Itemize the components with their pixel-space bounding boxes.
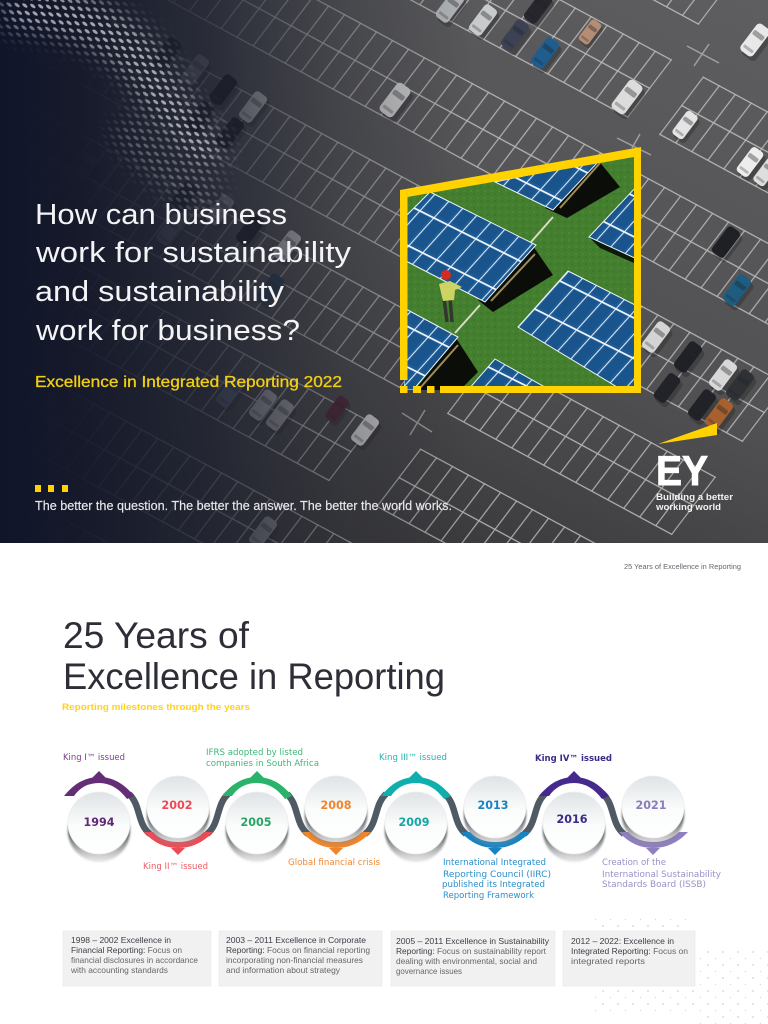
subheading: milestones: Reporting milestones through the years — [62, 702, 250, 713]
subtitle: report name: Excellence in Integrated Reporting 2022 — [35, 374, 342, 391]
milestone 2002 — [143, 776, 213, 872]
milestone 1994 — [63, 753, 134, 862]
panel: 2005-2011 Sustainability Reporting — [391, 931, 555, 986]
halftone dot swath — [0, 0, 240, 223]
milestone 2008 — [288, 776, 381, 868]
heading: cover question — [35, 199, 352, 347]
logo: EY: Building a better — [656, 492, 733, 503]
wave connector — [129, 794, 624, 834]
milestone 1994: King I™ issued — [63, 753, 125, 763]
panel: 2003-2011 Corporate Reporting: Reporting: Focus on financial reporting — [226, 945, 370, 955]
milestone 2013 — [442, 776, 551, 901]
logo: EY — [655, 423, 733, 513]
panel: 1998-2002 Financial Reporting: Financial Reporting: Focus on — [71, 945, 182, 955]
panel: 1998-2002 Financial Reporting: financial disclosures in accordance — [71, 955, 198, 965]
panel: 2005-2011 Sustainability Reporting: dealing with environmental, social and — [396, 956, 537, 966]
panel: 1998-2002 Financial Reporting: with accounting standards — [70, 965, 168, 975]
yellow frame — [400, 147, 641, 393]
road markings — [402, 44, 719, 435]
navy gradient overlay — [0, 0, 456, 543]
timeline: milestones 1994 to 2021 — [63, 748, 721, 901]
milestone 2009: 2009 — [398, 815, 430, 829]
panel: 1998-2002 Financial Reporting — [63, 931, 211, 986]
title: 25 Years of Excellence in Reporting: 25 Years of — [63, 615, 250, 656]
logo: EY: working world — [655, 502, 721, 513]
milestone 2013: International Integrated — [443, 858, 546, 868]
tagline: The better the question. The better the answer. The better the world works. — [35, 499, 452, 513]
panel: 2012-2022 Integrated Reporting: 2012 – 2022: Excellence in — [571, 936, 674, 946]
panel: 2012-2022 Integrated Reporting: integrated reports — [571, 956, 645, 966]
milestone 2013: Reporting Framework — [443, 891, 534, 901]
decorative dot arc — [590, 918, 768, 1024]
milestone 2016: 2016 — [556, 812, 588, 826]
milestone 2008: Global financial crisis — [288, 858, 381, 868]
milestone 2021: Creation of the — [602, 858, 666, 868]
worker in high-vis vest — [439, 270, 462, 322]
panel: 2005-2011 Sustainability Reporting: Reporting: Focus on sustainability report — [396, 946, 547, 956]
milestone 2009 — [379, 753, 451, 862]
panel: 2012-2022 Integrated Reporting — [563, 931, 695, 986]
milestone 2002: King II™ issued — [143, 862, 208, 872]
milestone 2021: 2021 — [636, 798, 666, 812]
milestone 2008: 2008 — [320, 798, 352, 812]
milestone 2005 — [206, 748, 319, 862]
panel: 1998-2002 Financial Reporting: 1998 – 2002 Excellence in — [71, 935, 171, 945]
panel: 2003-2011 Corporate Reporting — [219, 931, 382, 986]
title: 25 Years of Excellence in Reporting: Excellence in Reporting — [63, 656, 445, 697]
milestone 2002: 2002 — [162, 798, 192, 812]
parking bays — [104, 0, 768, 543]
milestone 2005: IFRS adopted by listed — [206, 748, 303, 758]
milestone 2021 — [602, 776, 721, 890]
milestone 2021: International Sustainability — [602, 870, 721, 880]
milestone 2021: Standards Board (ISSB) — [602, 880, 706, 890]
heading: cover question: How can business — [35, 199, 287, 231]
solar field — [400, 148, 640, 393]
panel: 2005-2011 Sustainability Reporting: 2005 – 2011 Excellence in Sustainability — [396, 936, 550, 946]
heading: cover question: work for sustainability — [35, 237, 352, 269]
icon: three yellow squares — [35, 485, 68, 492]
parked cars — [153, 0, 768, 543]
milestone 2013: Reporting Council (IIRC) — [443, 870, 551, 880]
panel: solar panel window in yellow frame — [400, 147, 641, 393]
panel: 2005-2011 Sustainability Reporting: governance issues — [396, 966, 462, 976]
panel: cover photo of car park — [0, 0, 768, 543]
page header: running title: 25 Years of Excellence in Reporting — [624, 562, 741, 571]
panel: 2003-2011 Corporate Reporting: 2003 – 2011 Excellence in Corporate — [226, 935, 366, 945]
panel: 2012-2022 Integrated Reporting: Integrated Reporting: Focus on — [571, 946, 688, 956]
milestone 2009: King III™ issued — [379, 753, 447, 763]
milestone 2013: 2013 — [478, 798, 508, 812]
milestone 2016 — [535, 754, 612, 862]
heading: cover question: and sustainability — [35, 276, 285, 308]
title: 25 Years of Excellence in Reporting — [63, 615, 445, 697]
milestone 2013: published its Integrated — [442, 880, 545, 890]
milestone 2016: King IV™ issued — [535, 754, 612, 764]
milestone 2005: 2005 — [240, 815, 272, 829]
milestone 2005: companies in South Africa — [206, 759, 319, 769]
panel: 2003-2011 Corporate Reporting: and information about strategy — [226, 965, 341, 975]
logo: EY: EY — [656, 447, 708, 494]
heading: cover question: work for business? — [35, 315, 300, 347]
panel: 2003-2011 Corporate Reporting: incorporating non-financial measures — [226, 955, 363, 965]
milestone 1994: 1994 — [84, 815, 114, 829]
